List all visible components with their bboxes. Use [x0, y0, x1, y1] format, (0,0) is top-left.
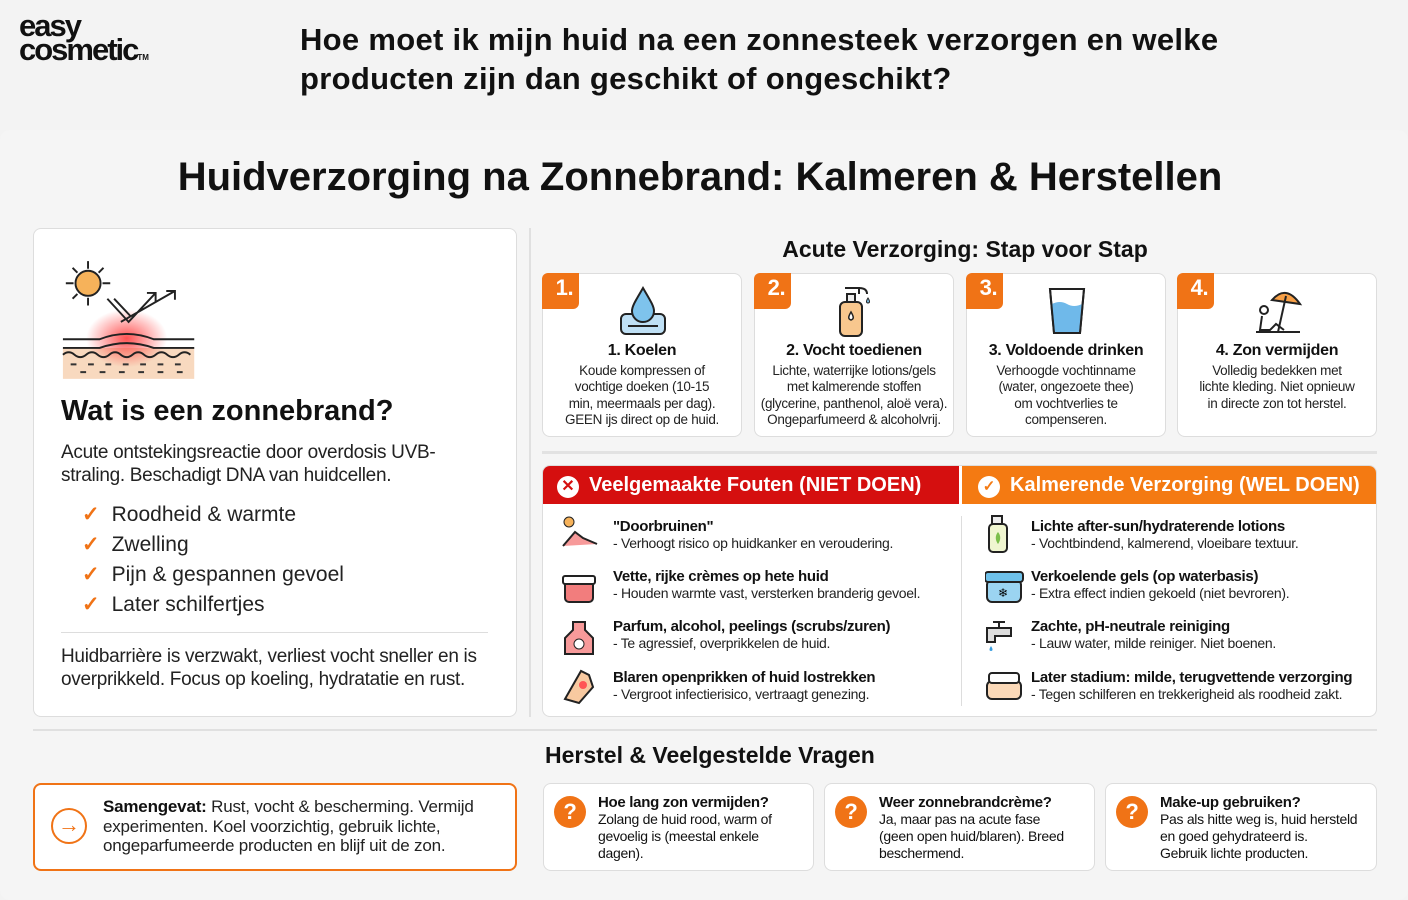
faq 2: ? — [844, 799, 858, 824]
step 4: 4. Zon vermijden — [1216, 342, 1338, 359]
faq 1: Hoe lang zon vermijden? — [598, 794, 769, 811]
step 3: 3. — [980, 275, 997, 300]
step 2: met kalmerende stoffen — [787, 379, 921, 394]
step 2 — [754, 273, 954, 437]
do items — [988, 515, 1298, 553]
step 2: Ongeparfumeerd & alcoholvrij. — [767, 412, 941, 427]
heading: acute care: Acute Verzorging: Stap voor Stap — [782, 236, 1148, 262]
do items: Lichte after-sun/hydraterende lotions — [1031, 518, 1285, 535]
header: don'ts: ✕ — [561, 478, 575, 495]
symptom list: ✓ Zwelling — [82, 533, 189, 556]
faq 3 — [1105, 783, 1377, 871]
don't items: - Verhoogt risico op huidkanker en veroudering. — [613, 535, 893, 551]
step 2: Lichte, waterrijke lotions/gels — [772, 362, 936, 378]
step 2: (glycerine, panthenol, aloë vera). — [761, 396, 947, 410]
faq 3: ? — [1125, 799, 1139, 824]
heading: Wat is een zonnebrand? — [61, 395, 393, 427]
faq 3: Pas als hitte weg is, huid hersteld — [1160, 811, 1357, 827]
symptom list: ✓ Later schilfertjes — [82, 593, 265, 616]
faq 2: (geen open huid/blaren). Breed — [879, 828, 1064, 844]
panel: mistakes and care: Vette, rijke crèmes op hete huid — [613, 568, 828, 585]
step 1: min, meermaals per dag). — [569, 396, 715, 410]
icon: sun on skin — [62, 261, 194, 379]
header: don'ts — [543, 466, 959, 504]
summary box: Samengevat: Rust, vocht & bescherming. Vermijd — [103, 797, 474, 816]
faq 3: Make-up gebruiken? — [1160, 794, 1300, 811]
step 3: compenseren. — [1025, 412, 1107, 427]
footer note — [61, 646, 477, 690]
step 1: vochtige doeken (10-15 — [575, 379, 709, 394]
logo: cosmeticTM — [19, 32, 149, 67]
panel: mistakes and care: - Tegen schilferen en trekkerigheid als roodheid zakt. — [1031, 686, 1342, 702]
step 3: Verhoogde vochtinname — [996, 362, 1136, 378]
step 4: lichte kleding. Niet opnieuw — [1199, 379, 1355, 394]
summary box: experimenten. Koel voorzichtig, gebruik lichte, — [103, 816, 440, 836]
don't items — [562, 516, 893, 551]
header: dos: Kalmerende Verzorging (WEL DOEN) — [1010, 474, 1360, 496]
step 4: in directe zon tot herstel. — [1208, 396, 1346, 410]
icon: arrow circle — [51, 808, 87, 844]
panel: mistakes and care: Verkoelende gels (op waterbasis) — [1031, 568, 1258, 585]
main title: Huidverzorging na Zonnebrand: Kalmeren & Herstellen — [178, 155, 1222, 199]
summary box: ongeparfumeerde producten en blijf uit de zon. — [103, 836, 445, 855]
step 4 — [1177, 273, 1377, 437]
header: don'ts: Veelgemaakte Fouten (NIET DOEN) — [589, 474, 921, 496]
footer note: overprikkeld. Focus op koeling, hydratatie en rust. — [61, 669, 465, 690]
description: straling. Beschadigt DNA van huidcellen. — [61, 465, 391, 486]
faq 1: Zolang de huid rood, warm of — [598, 811, 772, 827]
step 3 — [966, 273, 1166, 437]
summary box — [33, 783, 517, 871]
step 2: 2. Vocht toedienen — [786, 342, 922, 359]
heading: recovery faq: Herstel & Veelgestelde Vragen — [545, 742, 875, 768]
step 3: om vochtverlies te — [1014, 396, 1118, 410]
faq 2: beschermend. — [879, 845, 964, 861]
panel: mistakes and care: - Houden warmte vast, versterken branderig gevoel. — [613, 585, 920, 601]
symptom list — [82, 503, 344, 616]
do items: - Vochtbindend, kalmerend, vloeibare textuur. — [1031, 535, 1298, 551]
header question: Hoe moet ik mijn huid na een zonnesteek verzorgen en welke — [300, 22, 1218, 57]
header: dos: ✓ — [983, 478, 995, 495]
symptom list: ✓ Pijn & gespannen gevoel — [82, 563, 344, 586]
faq 2: Weer zonnebrandcrème? — [879, 794, 1052, 811]
faq 1: dagen). — [598, 845, 643, 861]
step 1: GEEN ijs direct op de huid. — [565, 412, 719, 427]
panel: mistakes and care: - Extra effect indien gekoeld (niet bevroren). — [1031, 585, 1289, 601]
faq 1 — [543, 783, 814, 871]
step 1: 1. — [556, 275, 573, 300]
footer note: Huidbarrière is verzwakt, verliest vocht sneller en is — [61, 646, 477, 667]
faq 2: Ja, maar pas na acute fase — [879, 811, 1040, 827]
header question: producten zijn dan geschikt of ongeschikt? — [300, 61, 952, 96]
step 3: 3. Voldoende drinken — [989, 342, 1143, 359]
logo — [19, 8, 149, 67]
panel: mistakes and care: - Vergroot infectierisico, vertraagt genezing. — [613, 686, 869, 702]
step 2: 2. — [768, 275, 785, 300]
panel: mistakes and care: Later stadium: milde, terugvettende verzorging — [1031, 669, 1352, 686]
panel: mistakes and care: ❄ — [998, 586, 1008, 600]
panel: mistakes and care: Zachte, pH-neutrale reiniging — [1031, 618, 1230, 635]
icon: arrow circle: → — [58, 812, 80, 837]
step 1: 1. Koelen — [608, 342, 676, 359]
symptom list: ✓ Roodheid & warmte — [82, 503, 296, 526]
step 1 — [542, 273, 742, 437]
faq 1: ? — [563, 799, 577, 824]
header question — [300, 22, 1218, 96]
step 1: Koude kompressen of — [579, 362, 705, 378]
panel: what is sunburn — [33, 228, 517, 717]
faq 3: en goed gehydrateerd is. — [1160, 828, 1308, 844]
faq 1: gevoelig is (meestal enkele — [598, 828, 759, 844]
description — [61, 442, 435, 486]
panel: mistakes and care: - Lauw water, milde reiniger. Niet boenen. — [1031, 635, 1276, 651]
step 4: Volledig bedekken met — [1212, 362, 1342, 378]
step 4: 4. — [1191, 275, 1208, 300]
header: dos — [962, 466, 1378, 504]
don't items: "Doorbruinen" — [613, 518, 713, 535]
logo: easy — [19, 8, 80, 43]
panel: mistakes and care: Parfum, alcohol, peelings (scrubs/zuren) — [613, 618, 890, 635]
step 3: (water, ongezoete thee) — [999, 379, 1133, 394]
faq 3: Gebruik lichte producten. — [1160, 845, 1308, 861]
description: Acute ontstekingsreactie door overdosis UVB- — [61, 442, 435, 463]
panel: mistakes and care: - Te agressief, overprikkelen de huid. — [613, 635, 830, 651]
panel: mistakes and care — [542, 465, 1377, 717]
faq 2 — [824, 783, 1095, 871]
panel: mistakes and care: Blaren openprikken of huid lostrekken — [613, 669, 875, 686]
